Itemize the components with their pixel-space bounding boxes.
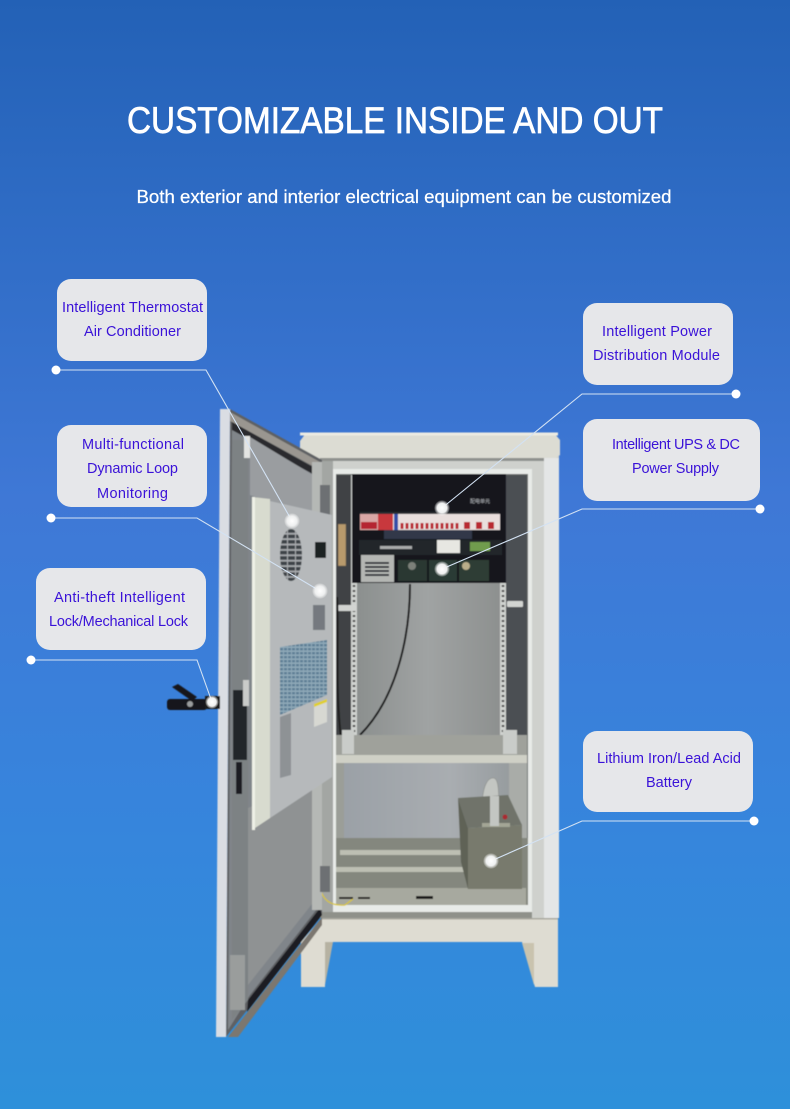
callout: intelligent power distribution module: Intelligent Power [602, 324, 712, 340]
leader line: lock [26, 656, 219, 709]
rectifier modules [361, 555, 489, 582]
callout: dynamic loop monitoring: Monitoring [97, 486, 168, 502]
leader line: air conditioner [52, 366, 300, 529]
cabinet body [318, 456, 559, 918]
lower compartment [336, 763, 528, 905]
callout: intelligent thermostat air conditioner: Intelligent Thermostat [62, 300, 203, 316]
illustration: open electrical cabinet [167, 409, 560, 1037]
door lock hardware [233, 680, 249, 794]
callout: intelligent thermostat air conditioner: Air Conditioner [84, 324, 181, 340]
door hinge block [244, 436, 250, 458]
interior dark side columns [336, 475, 527, 735]
callout: dynamic loop monitoring [57, 425, 207, 507]
door handle [167, 684, 220, 710]
yellow ground wire [320, 888, 353, 905]
subtitle: Both exterior and interior electrical equipment can be customized [136, 186, 672, 207]
equipment stack [352, 474, 506, 583]
callout: intelligent power distribution module [583, 303, 733, 385]
air grill [280, 640, 327, 715]
leader line: UPS [434, 504, 764, 577]
callout: anti-theft lock [36, 568, 206, 650]
fan vent [280, 529, 302, 581]
callout: anti-theft lock: Anti-theft Intelligent [54, 590, 185, 606]
rack rails [338, 475, 523, 753]
cabinet base and legs [301, 918, 558, 987]
cable by door [337, 597, 341, 738]
spec label [280, 713, 291, 778]
switch socket [315, 542, 326, 558]
interior back panel upper [355, 583, 501, 735]
callout: intelligent thermostat air conditioner [57, 279, 207, 361]
power distribution module [360, 498, 500, 539]
callout: intelligent power distribution module: Distribution Module [593, 348, 720, 364]
title: CUSTOMIZABLE INSIDE AND OUT [127, 100, 663, 141]
leader line: monitoring [46, 514, 328, 599]
door white edge [216, 409, 230, 1037]
control module [359, 540, 502, 555]
shelf [336, 730, 527, 763]
callout: UPS and DC power supply: Intelligent UPS & DC [612, 437, 740, 453]
callout: dynamic loop monitoring: Dynamic Loop [87, 461, 178, 477]
callout: UPS and DC power supply: Power Supply [632, 461, 720, 477]
air conditioner unit [252, 497, 332, 830]
nameplate [313, 605, 325, 630]
callout: lithium iron / lead acid battery: Lithium Iron/Lead Acid [597, 751, 741, 767]
leader line: power distribution [434, 390, 740, 516]
cabinet top cap [300, 432, 560, 461]
callout: anti-theft lock: Lock/Mechanical Lock [49, 614, 189, 630]
black power cable [360, 584, 410, 735]
battery [458, 778, 522, 889]
callout: lithium iron / lead acid battery: Battery [646, 775, 693, 791]
callout: UPS and DC power supply [583, 419, 760, 501]
leader line: battery [483, 816, 758, 869]
callout: lithium iron / lead acid battery [583, 731, 753, 812]
warning label [314, 700, 327, 727]
copper ground bar [338, 524, 346, 566]
power distribution module: 配电单元 [470, 498, 490, 505]
open door [226, 409, 330, 1037]
callout: dynamic loop monitoring: Multi-functional [82, 437, 184, 453]
